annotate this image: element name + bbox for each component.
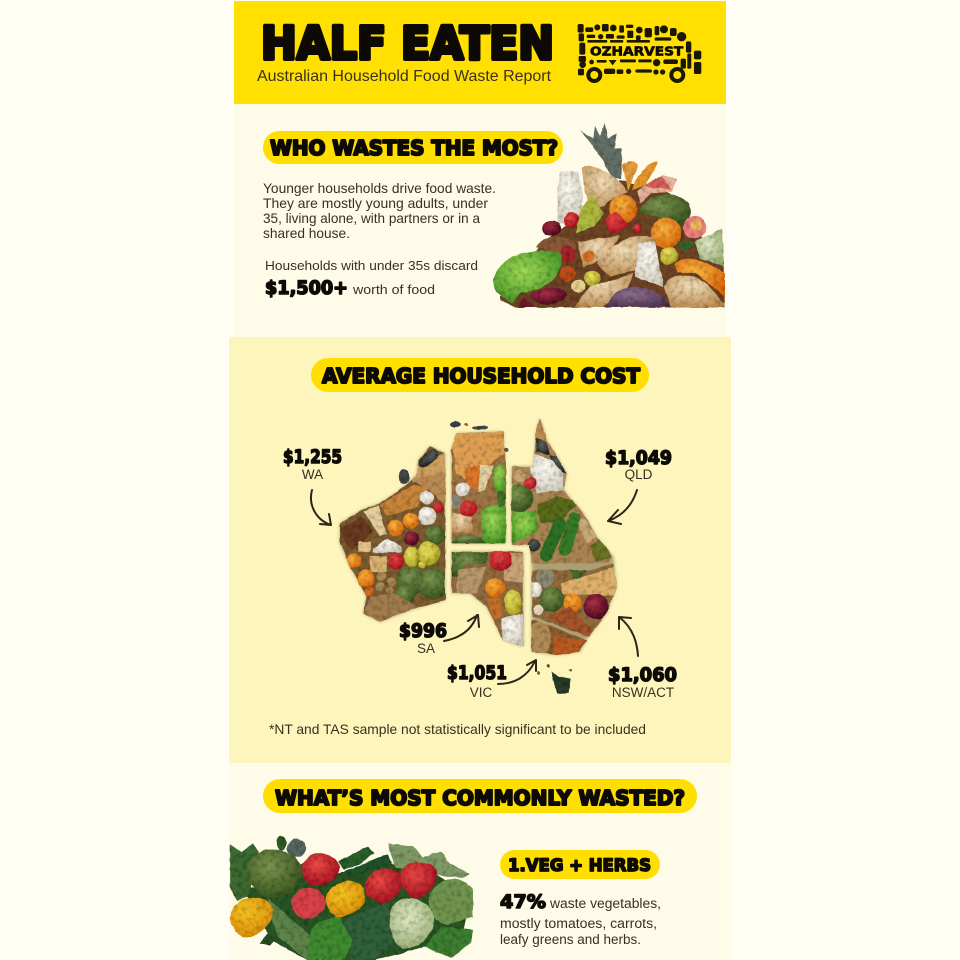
callout: $1,500+ (265, 258, 478, 299)
state: SA (450, 549, 525, 648)
callout: $1,500+: $1,500+ (265, 277, 348, 299)
state: NT (449, 430, 507, 545)
truck wheels (588, 69, 683, 81)
text block: veg statistic: waste vegetables, (549, 896, 661, 911)
label: VIC (447, 662, 507, 700)
label: QLD: $1,049 (605, 447, 672, 469)
arrow: QLD (608, 490, 637, 524)
text block: younger households: 35, living alone, with partners or in a (263, 211, 480, 226)
heading pill: what's most commonly wasted (263, 779, 697, 813)
header band (234, 1, 726, 104)
logo wordmark: OZHARVEST (590, 44, 684, 59)
arrow: WA (311, 490, 331, 525)
island crumbs (398, 422, 572, 674)
label: NSW/ACT: $1,060 (608, 664, 677, 686)
heading pill: average household cost (311, 358, 649, 392)
label: WA: WA (302, 467, 323, 482)
text block: younger households: They are mostly young adults, under (263, 196, 488, 211)
state: VIC (531, 620, 587, 655)
section: most commonly wasted background (229, 763, 731, 960)
arrow: NSW/ACT (619, 617, 638, 656)
heading pill: veg + herbs: 1.VEG + HERBS (508, 856, 651, 876)
heading pill: who wastes the most: WHO WASTES THE MOST? (270, 136, 558, 160)
map of Australia made of food (337, 417, 618, 694)
callout: $1,500+: Households with under 35s discard (265, 258, 478, 273)
state: WA (337, 443, 449, 623)
label: QLD (605, 447, 672, 482)
state: QLD (510, 418, 612, 564)
label: SA (399, 620, 447, 656)
label: WA (283, 446, 342, 482)
heading pill: veg + herbs (500, 850, 660, 879)
title: HALF EATEN (261, 17, 554, 70)
label: SA: SA (417, 641, 435, 656)
label: VIC: VIC (470, 685, 492, 700)
label: QLD: QLD (625, 467, 653, 482)
text block: veg statistic: 47% (500, 891, 546, 913)
heading pill: what's most commonly wasted: WHAT’S MOST COMMONLY WASTED? (275, 786, 685, 810)
state: NSW/ACT (528, 562, 618, 638)
label: NSW/ACT: NSW/ACT (612, 685, 674, 700)
callout: $1,500+: worth of food (352, 282, 435, 297)
illustration: pile of groceries (493, 123, 725, 307)
footnote: *NT and TAS sample not statistically significant to be included (269, 721, 646, 737)
subtitle: Australian Household Food Waste Report (257, 68, 552, 85)
text block: veg statistic: leafy greens and herbs. (500, 932, 641, 947)
label: WA: $1,255 (283, 446, 342, 468)
text block: veg statistic: mostly tomatoes, carrots, (500, 916, 657, 931)
text block: younger households: shared house. (263, 226, 350, 241)
arrow: SA (444, 615, 479, 641)
label: NSW/ACT (608, 664, 677, 700)
text block: veg statistic (500, 891, 661, 947)
illustration: vegetables (230, 836, 473, 960)
state: TAS (551, 671, 571, 694)
icon: OzHarvest food truck logo (578, 24, 701, 81)
text block: younger households: Younger households drive food waste. (263, 181, 496, 196)
label: SA: $996 (399, 620, 447, 642)
label: VIC: $1,051 (447, 662, 507, 684)
section: who wastes the most background (234, 104, 726, 337)
heading pill: average household cost: AVERAGE HOUSEHOLD COST (322, 364, 640, 388)
arrow: VIC (498, 660, 536, 684)
text block: younger households (263, 181, 496, 241)
panel: average household cost (229, 337, 731, 763)
